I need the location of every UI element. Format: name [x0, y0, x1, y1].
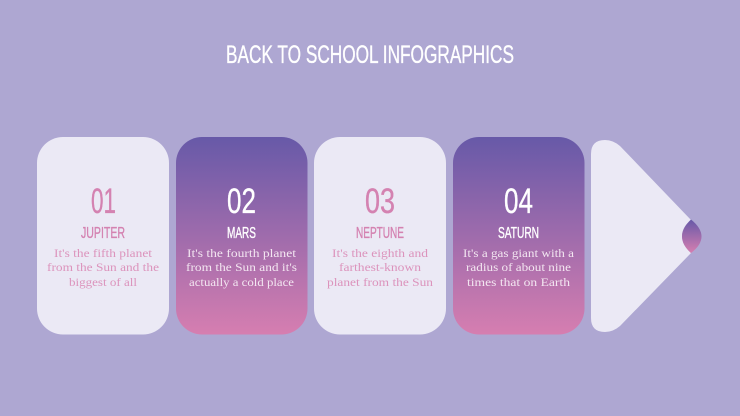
description: Jupiter: from the Sun and the [47, 262, 159, 274]
number 01: 01 [91, 182, 116, 221]
number 02: 02 [227, 182, 256, 221]
panel: Neptune [314, 137, 446, 334]
name: Saturn: SATURN [498, 225, 539, 242]
description: Saturn: radius of about nine [466, 262, 571, 274]
arrow tip lens [682, 220, 702, 253]
description: Neptune: farthest-known [339, 262, 421, 274]
panel: Saturn [453, 137, 584, 334]
name: Mars: MARS [227, 225, 256, 242]
description: Mars [186, 248, 298, 289]
description: Jupiter: biggest of all [69, 277, 137, 289]
description: Mars: from the Sun and it's [186, 262, 298, 274]
name: Jupiter: JUPITER [81, 225, 125, 242]
description: Saturn [463, 248, 574, 289]
description: Jupiter [47, 248, 159, 289]
description: Neptune: It's the eighth and [332, 248, 428, 260]
number 03: 03 [365, 182, 395, 221]
title: BACK TO SCHOOL INFOGRAPHICS [226, 41, 514, 69]
description: Saturn: times that on Earth [467, 277, 570, 289]
number 04: 04 [504, 182, 533, 221]
panel: Jupiter [37, 137, 169, 334]
arrow body [591, 140, 691, 332]
name: Neptune: NEPTUNE [356, 225, 404, 242]
description: Mars: actually a cold place [189, 277, 294, 289]
description: Neptune: planet from the Sun [327, 277, 433, 289]
description: Mars: It's the fourth planet [187, 248, 297, 260]
panel: Mars [176, 137, 308, 334]
description: Jupiter: It's the fifth planet [54, 248, 153, 260]
description: Saturn: It's a gas giant with a [463, 248, 574, 260]
arrow: pencil tip [591, 140, 702, 332]
description: Neptune [327, 248, 433, 289]
